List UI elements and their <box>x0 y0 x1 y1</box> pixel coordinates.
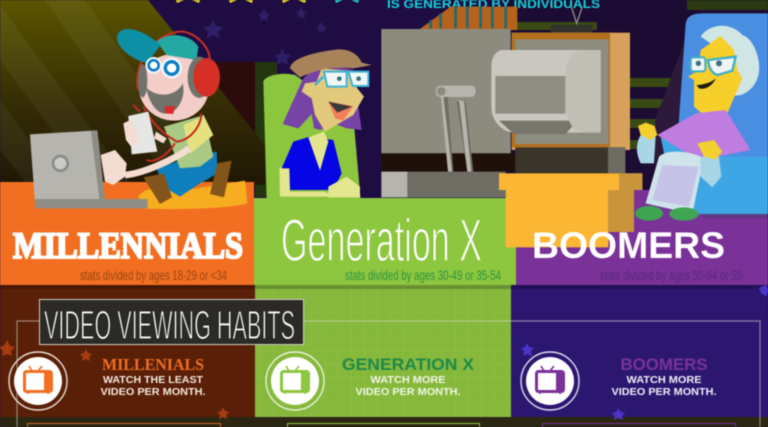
panel: Millennials stats <box>0 285 255 418</box>
text: Boomers finding: WATCH MORE <box>626 374 702 386</box>
boomer chair <box>677 13 768 187</box>
text: Millennials finding <box>100 355 206 398</box>
text: Millennials finding: WATCH THE LEAST <box>103 374 204 386</box>
panel: Generation X band <box>254 198 516 285</box>
cap <box>117 29 198 63</box>
stat box outlines <box>28 424 736 427</box>
beard <box>146 83 183 114</box>
mouth <box>328 102 353 121</box>
icon: Boomers TV <box>521 352 579 410</box>
arm and hand <box>125 148 189 175</box>
glasses <box>315 72 368 87</box>
flat cap <box>290 49 372 77</box>
house silhouette <box>421 7 517 30</box>
caption: Generation X ages: stats divided by ages 30-49 or 35-54 <box>345 267 501 283</box>
legs and boots <box>143 152 232 204</box>
hair <box>701 26 759 96</box>
neck and shirt <box>279 132 360 197</box>
panel: Boomers band <box>516 190 768 285</box>
text: Boomers finding <box>612 355 717 398</box>
yellow pedestal <box>499 173 642 247</box>
frame outline <box>17 321 760 427</box>
glasses <box>691 57 736 75</box>
hair <box>283 67 362 130</box>
character: millennial with laptop <box>30 29 372 209</box>
bottom strip <box>0 417 768 427</box>
text: Millennials finding: VIDEO PER MONTH. <box>100 386 206 398</box>
spotlight: olive rays <box>0 0 265 185</box>
text: Boomers finding: BOOMERS <box>620 355 708 374</box>
television and boomer scene <box>381 7 768 247</box>
panel: Boomers stats <box>511 285 768 418</box>
slippers <box>635 206 699 221</box>
band shadow <box>0 285 768 289</box>
back of big TV <box>381 29 516 197</box>
top stars: rating <box>176 0 359 3</box>
chair: Gen X <box>263 74 361 200</box>
text: Generation X finding <box>342 355 475 398</box>
heading: BOOMERS: BOOMERS <box>532 225 725 266</box>
phone and hand <box>123 112 167 154</box>
hands <box>638 123 722 159</box>
text: Boomers finding: VIDEO PER MONTH. <box>612 386 717 398</box>
heading: MILLENNIALS: MILLENNIALS <box>13 226 243 267</box>
caption: Millennials ages: stats divided by ages 18-29 or <34 <box>80 267 227 283</box>
panel: Millennials band <box>0 182 254 285</box>
headphones <box>138 57 220 98</box>
text: Generation X finding: VIDEO PER MONTH. <box>356 386 461 398</box>
icon: Generation X TV <box>266 352 324 410</box>
blanket <box>646 152 701 214</box>
panel decorations: stars <box>0 285 768 420</box>
headphone band <box>137 32 210 90</box>
eyes <box>145 57 182 78</box>
smile <box>697 78 716 89</box>
title box: Video Viewing Habits: VIDEO VIEWING HABITS <box>44 302 295 348</box>
earphone cable <box>133 105 201 161</box>
nose <box>143 70 170 91</box>
head <box>139 54 209 121</box>
text: Millennials finding: MILLENIALS <box>102 355 204 374</box>
blouse <box>657 110 751 157</box>
background: stars <box>203 7 327 65</box>
face <box>688 36 742 117</box>
background: night sky <box>0 0 768 197</box>
text: Generation X finding: GENERATION X <box>342 355 475 374</box>
cushion <box>138 181 247 209</box>
laptop <box>30 130 148 208</box>
title box: Video Viewing Habits <box>40 300 304 348</box>
heading: Generation X: Generation X <box>281 207 482 274</box>
icon: Millennials TV <box>9 352 67 410</box>
sleeves <box>637 135 721 187</box>
text: Generation X finding: WATCH MORE <box>370 374 446 386</box>
face <box>302 68 364 132</box>
panel: Generation X stats <box>255 285 511 418</box>
antenna <box>551 7 592 33</box>
chair shadow <box>702 214 768 218</box>
shirt <box>164 115 213 168</box>
wooden TV cabinet <box>491 33 630 173</box>
